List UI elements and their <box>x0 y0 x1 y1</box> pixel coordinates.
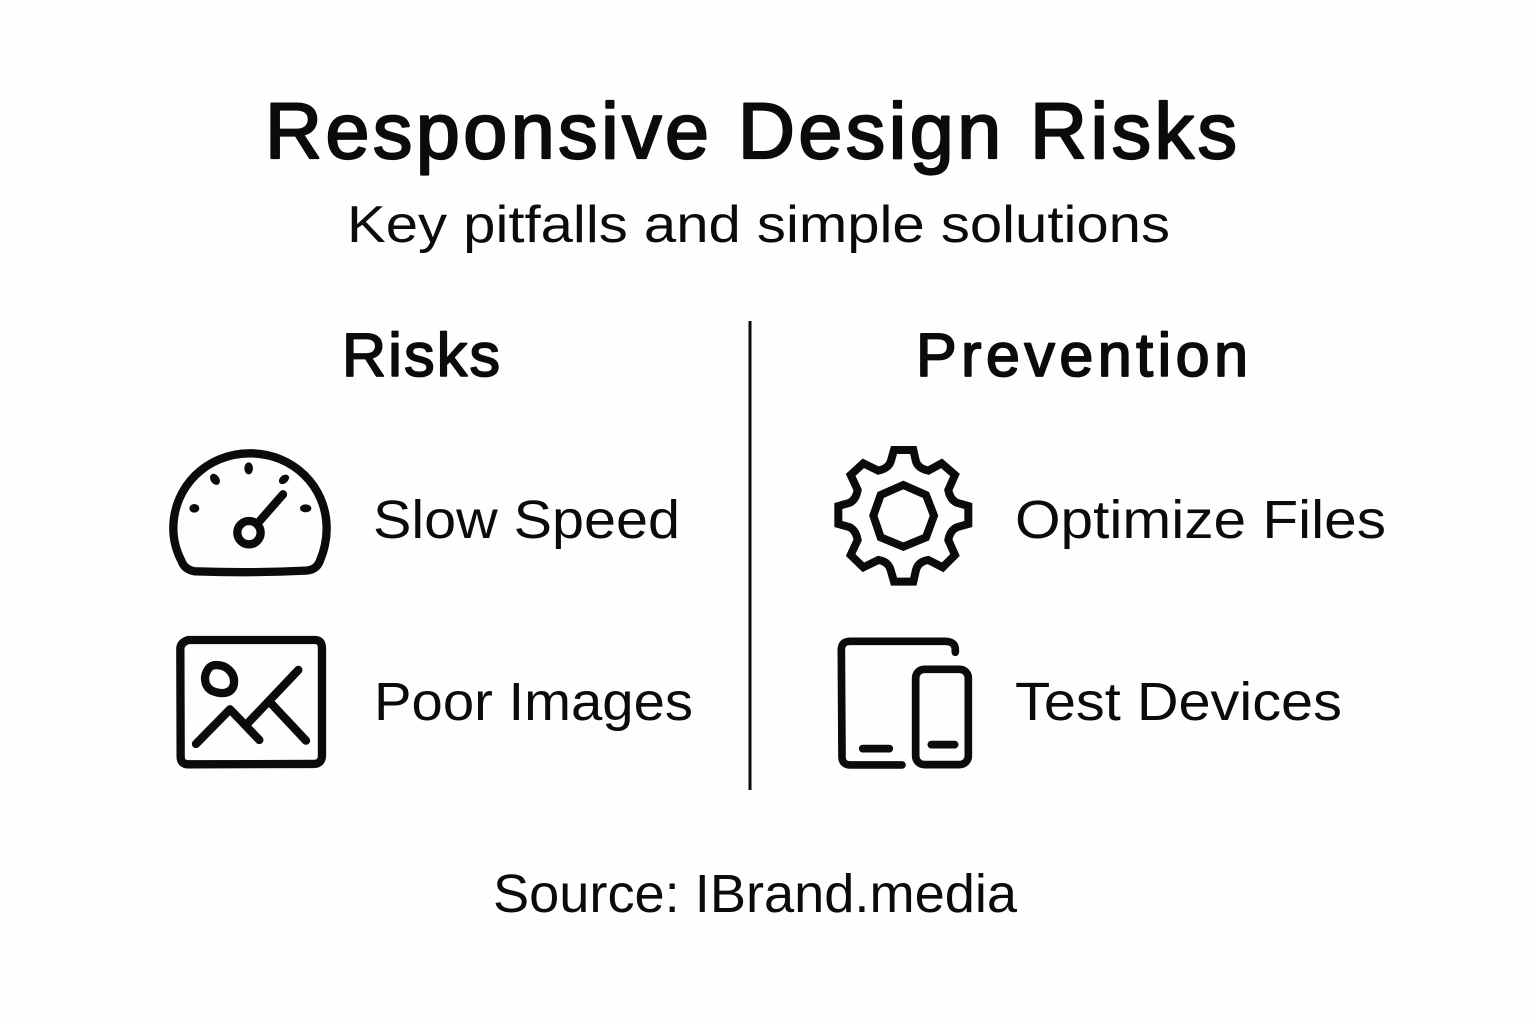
heading: risks: Risks <box>342 321 500 389</box>
icon: speedometer <box>173 453 327 572</box>
icon: image <box>180 640 322 764</box>
icon: tablet and phone <box>841 641 968 765</box>
risk item: slow speed <box>173 453 680 572</box>
source: Source: IBrand.media <box>493 864 1018 924</box>
center divider <box>748 321 752 790</box>
prevention item: test devices <box>841 641 1342 765</box>
label: test devices: Test Devices <box>1015 672 1342 732</box>
panel: prevention <box>838 321 1386 765</box>
panel: risks <box>173 321 693 764</box>
risk item: poor images <box>180 640 693 764</box>
prevention item: optimize files <box>838 450 1386 582</box>
icon: gear <box>838 450 968 582</box>
label: poor images: Poor Images <box>374 672 693 732</box>
label: optimize files: Optimize Files <box>1015 490 1386 550</box>
heading: prevention: Prevention <box>916 321 1248 389</box>
title: Responsive Design Risks <box>265 86 1237 175</box>
label: slow speed: Slow Speed <box>373 490 680 550</box>
subtitle: Key pitfalls and simple solutions <box>347 196 1170 254</box>
